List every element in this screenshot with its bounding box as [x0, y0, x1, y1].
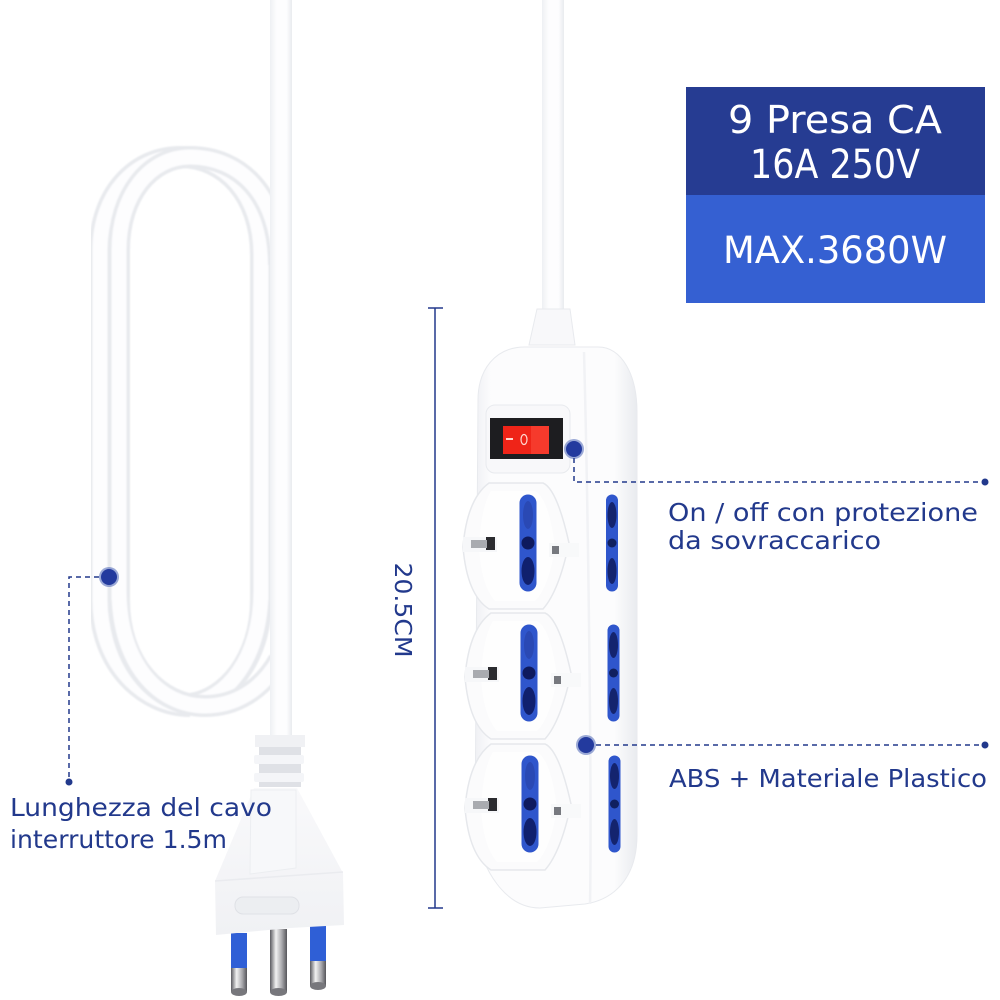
callout text: switch	[668, 498, 978, 555]
side socket 1	[606, 494, 618, 592]
callout: cable length	[10, 567, 272, 854]
rating heading: 9 Presa CA	[728, 98, 942, 142]
socket 2	[465, 613, 581, 739]
max power: MAX.3680W	[723, 229, 947, 272]
callout text: material: ABS + Materiale Plastico	[669, 764, 987, 793]
callout text: cable length	[10, 793, 272, 854]
plug body	[215, 788, 344, 935]
plug strain relief collar	[254, 735, 305, 787]
side socket 2	[608, 624, 620, 722]
callout text: switch: da sovraccarico	[668, 526, 881, 555]
power strip body	[463, 347, 637, 908]
callout: material	[576, 735, 988, 793]
strip cable	[529, 0, 575, 345]
plug pin right	[310, 926, 326, 990]
switch	[486, 405, 570, 473]
socket 1	[463, 483, 579, 609]
socket 3	[465, 744, 581, 870]
rating heading: 16A 250V	[750, 142, 921, 188]
callout text: cable length: interruttore 1.5m	[10, 825, 227, 854]
dimension line	[428, 308, 443, 908]
side socket 3	[608, 756, 620, 852]
mains plug	[215, 735, 344, 996]
panel: rating	[686, 87, 985, 303]
callout: switch	[564, 439, 988, 555]
callout text: cable length: Lunghezza del cavo	[10, 793, 272, 822]
power cable coil	[100, 0, 292, 745]
dimension label: 20.5CM	[389, 562, 415, 658]
plug pin middle	[270, 929, 287, 996]
plug pin left	[231, 933, 247, 996]
rating heading	[728, 98, 942, 188]
callout text: switch: On / off con protezione	[668, 498, 978, 527]
